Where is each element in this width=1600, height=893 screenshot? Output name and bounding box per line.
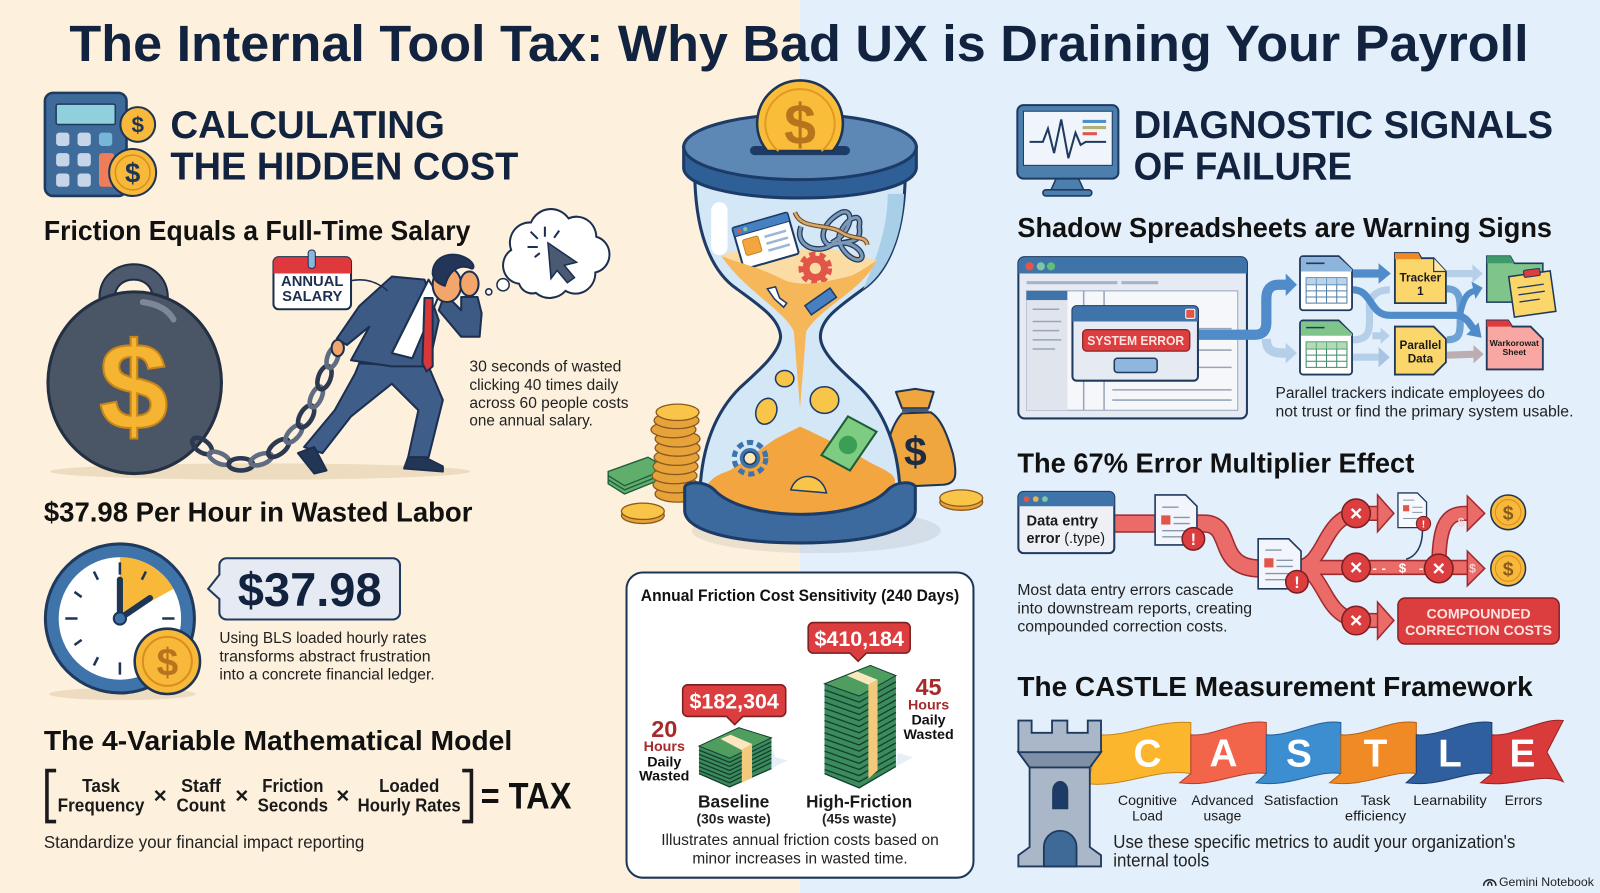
icon: thought bubble with cursor (486, 209, 609, 298)
panel: calculating the hidden cost (45, 93, 519, 196)
box: compounded correction costs (1398, 598, 1559, 644)
icons: failure markers: × (1433, 557, 1445, 581)
banner: C (1088, 722, 1191, 784)
icon: money bag: $ (904, 428, 927, 474)
icon: broken UI window (732, 212, 799, 269)
labels: CASTLE dimensions: efficiency (1345, 809, 1407, 825)
text: standardize reporting: Standardize your financial impact reporting (44, 832, 364, 852)
text: BLS explanation: transforms abstract frustration (219, 648, 431, 665)
labels: CASTLE dimensions: Cognitive (1118, 793, 1177, 809)
icon: blue gear (734, 442, 766, 474)
text: CASTLE audit note: internal tools (1113, 849, 1209, 870)
label: 20 hours daily wasted: Wasted (639, 769, 689, 785)
illustration: weight, chain and businessman (48, 209, 609, 480)
file: parallel data (1395, 327, 1446, 375)
coin stacks and cash (608, 404, 983, 524)
formula: tax model: Staff (181, 775, 222, 796)
file: parallel data: Parallel (1400, 339, 1441, 352)
dialog: system error (1072, 306, 1198, 381)
icon: red gear (801, 254, 830, 283)
illustration: main app window with system error (1018, 257, 1247, 418)
formula: tax model: Loaded (379, 775, 439, 796)
text: wasted clicking explanation: clicking 40 times daily (469, 377, 618, 394)
heading: CASTLE framework: The CASTLE Measurement Framework (1017, 671, 1533, 702)
icon: calculator with coins (45, 93, 156, 196)
icons: failure markers: × (1350, 609, 1362, 633)
banner: C: C (1133, 732, 1161, 775)
icon: falling coins and debris (752, 287, 839, 427)
callout: $37.98: $37.98 (238, 564, 382, 616)
icon: document with alert 3: ! (1422, 520, 1425, 531)
icon: clock with coin: $ (157, 642, 179, 685)
label: 45 hours daily wasted (903, 674, 954, 743)
formula: tax model: Frequency (58, 794, 145, 815)
spreadsheet: green (1300, 320, 1352, 375)
icons: failure markers: × (1350, 556, 1362, 580)
file: tracker 1 (1395, 253, 1446, 303)
text: chart caption (661, 832, 939, 867)
callout: $410,184: $410,184 (815, 627, 904, 651)
banner: E (1481, 720, 1563, 784)
labels: CASTLE dimensions: Task (1361, 793, 1391, 809)
banner: L: L (1438, 732, 1462, 775)
formula: tax model: × (235, 783, 248, 808)
banner: A (1180, 722, 1266, 784)
bottom sand (703, 427, 897, 515)
diagram: error cascade: $ (1458, 516, 1465, 530)
text: parallel trackers explanation: not trust or find the primary system usable. (1276, 403, 1573, 420)
label: 20 hours daily wasted: Hours (644, 739, 685, 755)
banner: E: E (1510, 732, 1535, 775)
icon: dollar bill (821, 416, 877, 470)
labels: CASTLE dimensions: Advanced (1191, 793, 1254, 809)
formula: tax model: Hourly Rates (358, 794, 461, 815)
text: wasted clicking explanation: one annual salary. (469, 413, 593, 430)
icon: dollar weight (48, 272, 221, 474)
icon: dollar weight: $ (99, 318, 168, 457)
spreadsheet: blue (1300, 256, 1352, 310)
text: chart caption: Illustrates annual friction costs based on (661, 832, 939, 849)
label: 20 hours daily wasted: Daily (647, 754, 681, 770)
icon: monitor with heartbeat (1017, 105, 1118, 196)
text: wasted clicking explanation: across 60 people costs (469, 395, 629, 412)
panel: annual friction cost sensitivity chart (627, 573, 973, 878)
diagram: error cascade: $ (1469, 562, 1476, 576)
callout: $182,304 (683, 685, 786, 725)
labels: CASTLE dimensions: Load (1132, 809, 1163, 825)
ribbons: red flow paths (1114, 513, 1471, 621)
coin entering slot: $ (784, 93, 816, 157)
label: baseline: (30s waste) (697, 812, 771, 827)
heading: calculating the hidden cost: THE HIDDEN COST (170, 146, 519, 189)
label: high-friction: High-Friction (806, 791, 912, 811)
heading: shadow spreadsheets: Shadow Spreadsheets are Warning Signs (1017, 212, 1552, 243)
top sand: front (721, 256, 877, 408)
formula: tax model: Friction (262, 775, 323, 796)
file: red sheet: Warkorowat (1490, 338, 1539, 348)
glass body (695, 182, 905, 490)
illustration: castle banner (1018, 720, 1563, 866)
box: data entry error: error (.type) (1027, 531, 1105, 547)
banner: T (1330, 722, 1416, 784)
banner: L (1406, 722, 1492, 784)
labels: CASTLE dimensions (1118, 793, 1542, 825)
text: BLS explanation: into a concrete financial ledger. (219, 667, 435, 684)
label: 20 hours daily wasted: 20 (651, 716, 677, 742)
stack: high-friction cash (824, 665, 913, 788)
heading: diagnostic signals of failure: DIAGNOSTIC SIGNALS (1134, 104, 1553, 147)
icon: green folder with sticky note (1487, 256, 1556, 317)
icon: document with alert 1 (1155, 495, 1205, 550)
label: annual salary calendar tag: SALARY (282, 289, 342, 305)
label: high-friction: (45s waste) (822, 812, 896, 827)
label: baseline (697, 791, 771, 827)
text: parallel trackers explanation: Parallel trackers indicate employees do (1276, 385, 1545, 402)
base (685, 483, 915, 543)
label: annual salary calendar tag: ANNUAL (281, 274, 343, 290)
illustration: hourglass piggy bank (608, 80, 983, 553)
chain (189, 345, 341, 470)
icons: coins (1491, 495, 1526, 586)
file: red sheet: Sheet (1502, 347, 1526, 357)
callout: $410,184 (808, 623, 910, 661)
labels: CASTLE dimensions: Satisfaction (1264, 793, 1338, 809)
icon: document with alert 3 (1398, 493, 1431, 531)
chart title: Annual Friction Cost Sensitivity (240 Days) (641, 586, 959, 605)
text: chart caption: minor increases in wasted time. (692, 850, 908, 867)
icon: calculator with coins: $ (125, 158, 140, 189)
diagram: error cascade: -- $ - (1372, 561, 1423, 576)
icon: castle tower (1018, 721, 1101, 866)
box: compounded correction costs: COMPOUNDED (1427, 606, 1531, 622)
icon: document with alert 1: ! (1191, 531, 1196, 549)
file: tracker 1: 1 (1417, 285, 1424, 298)
formula: tax model: × (154, 783, 167, 808)
heading: $37.98 per hour: $37.98 Per Hour in Wasted Labor (44, 497, 473, 528)
icon: document with alert 2: ! (1294, 574, 1300, 592)
label: 45 hours daily wasted: Hours (908, 697, 949, 713)
arrows: faded flows (1266, 274, 1474, 357)
stack: baseline cash (699, 728, 788, 787)
icon: document with alert 2 (1258, 539, 1308, 593)
label: 20 hours daily wasted (639, 716, 689, 785)
labels: CASTLE dimensions: usage (1204, 809, 1241, 825)
label: 45 hours daily wasted: Wasted (903, 727, 954, 743)
icons: coins: $ (1503, 502, 1514, 524)
credit: Gemini Notebook: Gemini Notebook (1499, 875, 1595, 889)
box: data entry error (1018, 492, 1114, 553)
text: wasted clicking explanation: 30 seconds of wasted (469, 358, 621, 375)
banner: T: T (1364, 732, 1388, 775)
formula: tax model (47, 771, 572, 822)
text: BLS explanation: Using BLS loaded hourly rates (219, 630, 427, 647)
labels: CASTLE dimensions: Errors (1505, 793, 1542, 809)
heading: 67% error multiplier: The 67% Error Multiplier Effect (1017, 448, 1414, 479)
heading: calculating the hidden cost: CALCULATING (170, 104, 445, 147)
formula: tax model: = TAX (481, 775, 572, 816)
formula: tax model: Seconds (258, 794, 328, 815)
file: red sheet (1487, 320, 1543, 369)
formula: tax model: Count (177, 794, 226, 815)
icon: calculator with coins: $ (132, 113, 145, 138)
text: data entry errors cascade: compounded correction costs. (1017, 619, 1228, 636)
label: 45 hours daily wasted: Daily (912, 713, 946, 729)
diagram: error cascade (1018, 492, 1559, 644)
banner: A: A (1209, 732, 1237, 775)
panel: diagnostic signals of failure (1017, 104, 1553, 196)
text: CASTLE audit note: Use these specific metrics to audit your organization's (1113, 831, 1515, 852)
heading: 4-variable model: The 4-Variable Mathematical Model (44, 725, 512, 756)
icons: failure markers (1342, 499, 1453, 635)
text: data entry errors cascade: into downstream reports, creating (1017, 600, 1252, 617)
callout: $37.98 (208, 558, 400, 619)
icon: clock with coin (45, 544, 200, 700)
label: annual salary calendar tag (273, 250, 388, 309)
heading: diagnostic signals of failure: OF FAILURE (1134, 146, 1352, 189)
dialog: system error: SYSTEM ERROR (1087, 333, 1185, 348)
label: baseline: Baseline (698, 791, 770, 811)
formula: tax model: Task (82, 775, 121, 796)
figure: businessman pulling chain (298, 255, 482, 474)
box: data entry error: Data entry (1027, 514, 1099, 530)
lid (684, 114, 916, 198)
callout: $182,304: $182,304 (690, 689, 779, 713)
diagram: data flowing to shadow spreadsheets (1199, 253, 1556, 375)
heading: friction equals a full-time salary: Friction Equals a Full-Time Salary (44, 215, 471, 246)
banner: S: S (1286, 732, 1312, 775)
icon: tangled wires (795, 212, 867, 260)
file: tracker 1: Tracker (1400, 272, 1442, 285)
text: data entry errors cascade: Most data entry errors cascade (1017, 582, 1234, 599)
coin entering slot (750, 80, 850, 157)
title: The Internal Tool Tax: Why Bad UX is Draining Your Payroll (69, 15, 1529, 72)
top sand: light surface (721, 245, 877, 408)
icons: coins: $ (1503, 559, 1514, 581)
banner: S (1256, 722, 1341, 784)
icons: failure markers: × (1350, 501, 1362, 525)
labels: CASTLE dimensions: Learnability (1413, 793, 1488, 809)
arrows: main flows (1199, 274, 1474, 335)
label: high-friction (806, 791, 912, 827)
half coin in sand (791, 476, 827, 493)
icon: money bag (886, 389, 955, 487)
label: 45 hours daily wasted: 45 (916, 674, 942, 700)
file: parallel data: Data (1408, 352, 1434, 365)
box: compounded correction costs: CORRECTION COSTS (1405, 623, 1552, 639)
formula: tax model: × (336, 783, 349, 808)
